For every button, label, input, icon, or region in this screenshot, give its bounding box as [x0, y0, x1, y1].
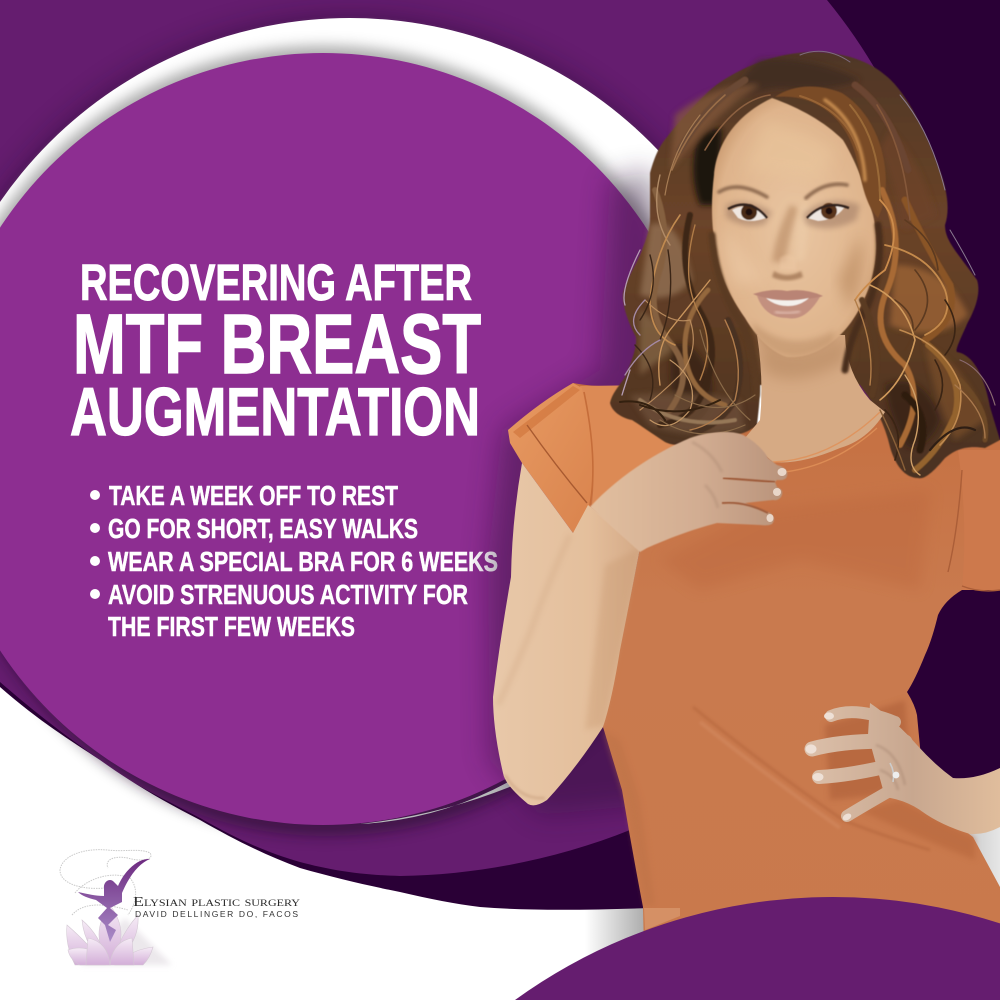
hair curl ribbons	[640, 80, 986, 470]
background: white lower left region	[0, 687, 650, 1000]
bottom right purple circle	[515, 897, 1000, 1000]
title: AUGMENTATION	[70, 374, 480, 450]
bullet list: AVOID STRENUOUS ACTIVITY FOR	[108, 579, 468, 610]
inner shade on white ring	[0, 38, 650, 232]
bullet list: THE FIRST FEW WEEKS	[108, 611, 355, 642]
neck shadow	[757, 330, 848, 379]
woman photo illustration	[493, 51, 1000, 1000]
shirt shading	[603, 490, 975, 930]
forelock over forehead	[775, 86, 886, 218]
left sleeve	[508, 383, 594, 533]
logo lotus	[67, 905, 153, 965]
shoulder area of shirt	[580, 385, 720, 505]
logo soft shade	[80, 918, 172, 965]
upper hand	[590, 432, 787, 552]
shadow of the white ring	[0, 7, 664, 202]
white ring sliver under circle	[360, 780, 512, 824]
face	[712, 98, 877, 357]
logo dancer	[78, 859, 150, 942]
eyes	[728, 203, 849, 221]
facial shading	[724, 120, 862, 355]
bullet list	[90, 480, 498, 642]
background: grey patch right of the waist	[950, 815, 1000, 940]
hair light and dark patches	[630, 59, 985, 448]
bullet list: WEAR A SPECIAL BRA FOR 6 WEEKS	[108, 546, 498, 577]
eyebrows	[719, 184, 847, 198]
left arm	[493, 463, 640, 805]
logo	[60, 850, 301, 965]
bullet list: GO FOR SHORT, EASY WALKS	[108, 513, 418, 544]
shadow beneath main circle	[0, 620, 600, 836]
main purple circle	[0, 53, 709, 825]
lips and teeth	[753, 290, 823, 319]
dark hair beside the cheeks	[712, 225, 880, 395]
soft shadow cast by the woman	[488, 170, 700, 815]
logo: DAVID DELLINGER DO, FACOS	[135, 909, 298, 919]
title: MTF BREAST	[73, 297, 481, 391]
title	[70, 254, 481, 450]
title: RECOVERING AFTER	[80, 254, 472, 311]
bullet list: TAKE A WEEK OFF TO REST	[109, 480, 398, 511]
neckline stitching	[773, 412, 880, 473]
hair mass	[610, 52, 1000, 478]
lower hand with ring	[806, 703, 1000, 834]
right sleeve	[948, 450, 1000, 591]
neck and chest	[745, 335, 885, 462]
shirt torso	[573, 383, 1000, 1000]
logo text: Elysian plastic surgery	[133, 894, 301, 909]
logo swirl outline	[60, 850, 151, 915]
fine hair strands	[620, 51, 995, 475]
white ring behind main circle	[0, 18, 762, 424]
